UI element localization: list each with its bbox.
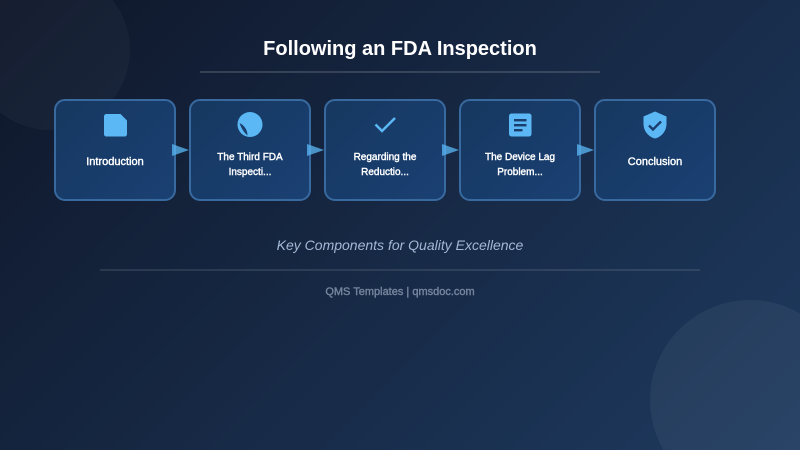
label: Regarding the Reductio...: Reductio...: [361, 167, 409, 178]
panel: The Third FDA Inspection: [189, 99, 311, 201]
subtitle: Key Components for Quality Excellence: [277, 237, 523, 253]
label: The Device Lag Problem...: The Device Lag: [485, 152, 555, 163]
arrow 1: [172, 144, 189, 156]
label: The Third FDA Inspecti...: The Third FDA: [217, 152, 283, 163]
arrow 4: [577, 144, 594, 156]
icon: shield check: [644, 112, 666, 138]
panel: The Device Lag Problem: [459, 99, 581, 201]
footer divider: [100, 269, 700, 271]
icon: circle leaf: [238, 112, 262, 137]
icon: text document: [509, 114, 532, 136]
arrow 3: [442, 144, 459, 156]
label: The Device Lag Problem...: Problem...: [497, 167, 543, 178]
icon: document: [104, 114, 127, 136]
panel: Regarding the Reduction: [324, 99, 446, 201]
arrow 2: [307, 144, 324, 156]
panel: Conclusion: [594, 99, 716, 201]
title: Following an FDA Inspection: [263, 38, 537, 60]
label: Regarding the Reductio...: [354, 152, 416, 178]
label: The Third FDA Inspecti...: Inspecti...: [229, 167, 271, 178]
title underline: [200, 71, 600, 73]
footer text: QMS Templates | qmsdoc.com: [325, 286, 475, 298]
label: The Third FDA Inspecti...: [217, 152, 283, 178]
label: Conclusion: Conclusion: [628, 156, 682, 168]
panel: Introduction: [54, 99, 176, 201]
label: Introduction: Introduction: [86, 156, 144, 168]
label: The Device Lag Problem...: [485, 152, 555, 178]
icon: check mark: [374, 117, 396, 133]
label: Regarding the Reductio...: Regarding the: [354, 152, 416, 163]
